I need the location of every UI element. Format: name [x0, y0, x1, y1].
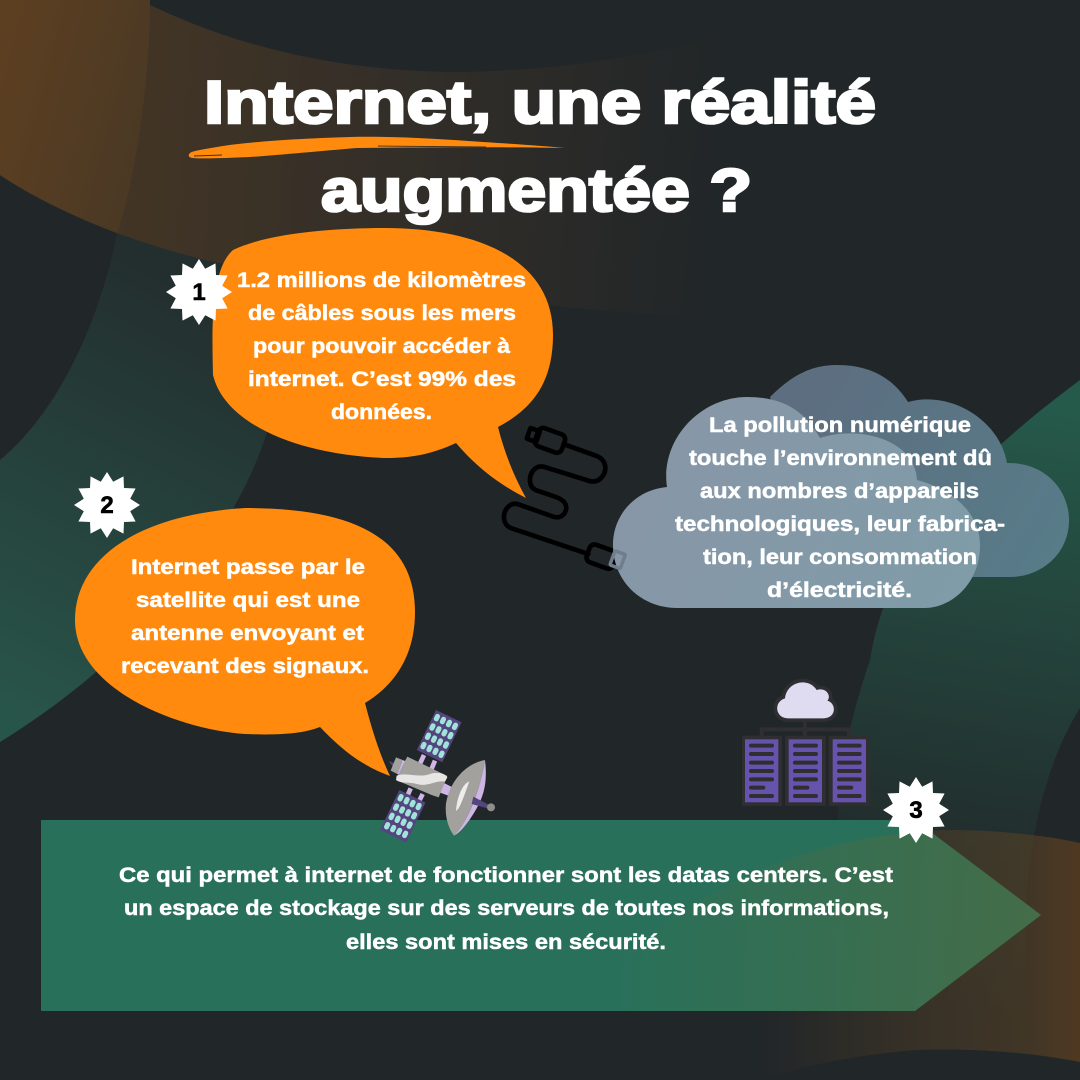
cloud text: touche l’environnement dû	[689, 447, 992, 470]
dish	[446, 760, 485, 836]
badge 3	[883, 777, 949, 843]
badge 2	[74, 472, 140, 538]
bubble 2 text: antenne envoyant et	[131, 622, 364, 645]
cable plug under cloud	[610, 551, 625, 569]
title: augmentée ?	[321, 157, 752, 224]
bubble 1 text: internet. C’est 99% des	[248, 368, 516, 391]
body	[396, 757, 447, 797]
bubble 1 text	[237, 269, 526, 424]
arrow text: un espace de stockage sur des serveurs de toutes nos informations,	[124, 897, 889, 920]
badge 1	[166, 259, 232, 325]
dish highlight	[456, 781, 469, 811]
panel: cloud pollution	[610, 365, 1069, 608]
title: Internet, une réalité	[204, 69, 876, 136]
badge 1: 1	[192, 279, 206, 306]
title underline brush stroke	[189, 137, 565, 158]
bubble 2 text: Internet passe par le	[131, 556, 365, 579]
panel: speech bubble 2	[75, 508, 415, 776]
lower solar panel	[380, 790, 425, 843]
body end cap	[391, 757, 403, 774]
front cloud	[613, 397, 980, 608]
bubble 1 text: données.	[331, 401, 432, 424]
panel: speech bubble 1	[212, 228, 553, 498]
bubble 2 text: recevant des signaux.	[121, 655, 369, 678]
server rack 3	[829, 736, 870, 806]
struts	[407, 755, 435, 801]
server rack 2	[785, 736, 826, 806]
bubble 2 text	[121, 556, 369, 678]
icon: cable	[504, 426, 618, 570]
cloud text: La pollution numérique	[709, 414, 971, 437]
upper solar panel	[417, 710, 462, 762]
arrow text: Ce qui permet à internet de fonctionner sont les datas centers. C’est	[119, 864, 893, 887]
dish rim	[454, 760, 486, 836]
body stripe	[396, 773, 447, 785]
icon: servers and cloud	[742, 682, 870, 806]
arrow text	[119, 864, 893, 954]
cloud text	[675, 414, 1005, 602]
arrow text: elles sont mises en sécurité.	[346, 931, 666, 954]
panel: green arrow	[41, 820, 1080, 1020]
server rack 1	[742, 736, 782, 806]
neck	[440, 783, 453, 796]
antenna tip	[389, 761, 395, 767]
cloud text: technologiques, leur fabrica-	[675, 513, 1005, 536]
bubble 1 text: 1.2 millions de kilomètres	[237, 269, 526, 292]
small cloud	[777, 682, 834, 718]
back cloud	[770, 365, 1069, 577]
cloud text: tion, leur consommation	[703, 546, 977, 569]
cloud text: d’électricité.	[767, 579, 912, 602]
connectors	[762, 720, 849, 736]
icon: satellite	[380, 710, 495, 843]
cloud text: aux nombres d’appareils	[700, 480, 979, 503]
bubble 2 text: satellite qui est une	[136, 589, 360, 612]
badge 2: 2	[100, 492, 114, 519]
title	[189, 69, 876, 224]
bubble 1 text: de câbles sous les mers	[248, 302, 516, 325]
bubble 1 text: pour pouvoir accéder à	[253, 335, 510, 358]
badge 3: 3	[909, 797, 923, 824]
dish arm	[472, 797, 490, 809]
